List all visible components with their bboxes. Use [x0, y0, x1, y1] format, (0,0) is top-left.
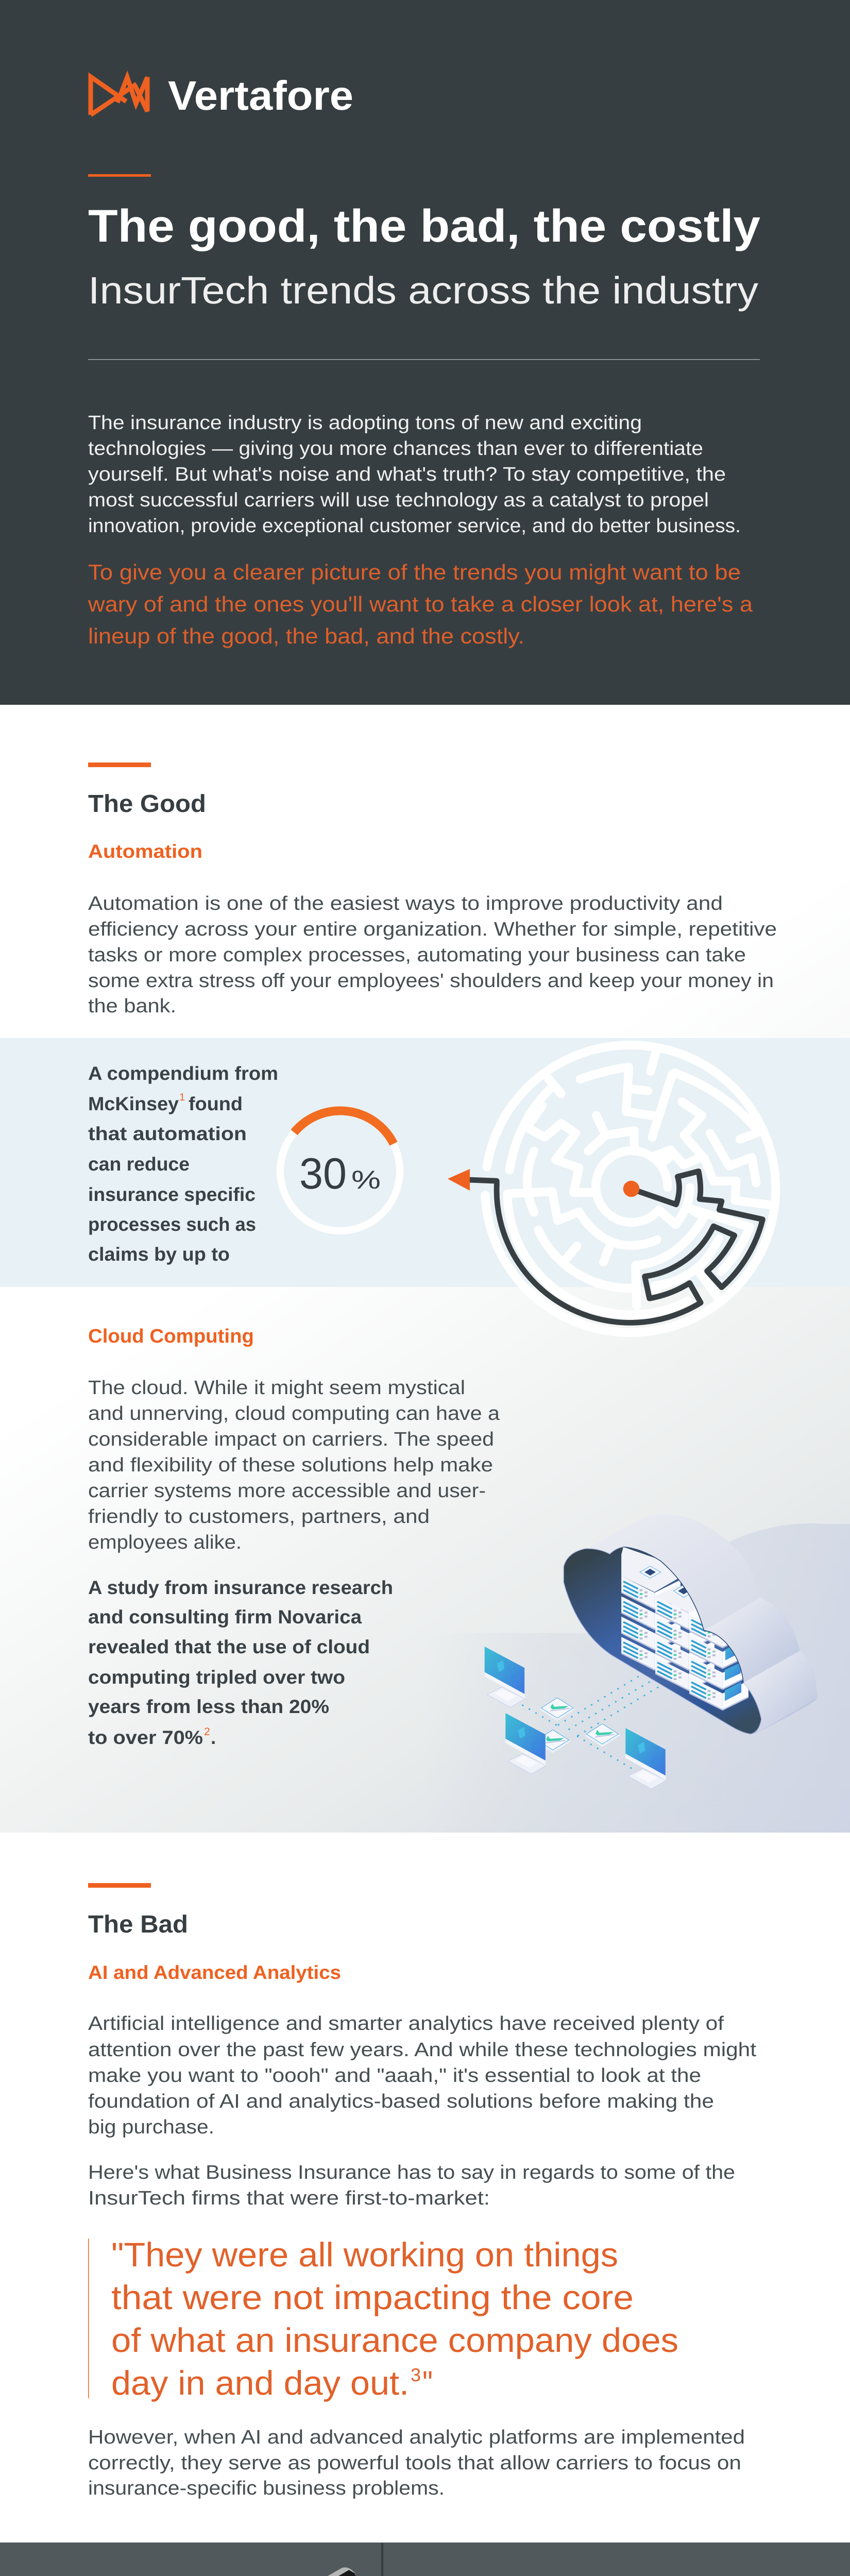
logo: Vertafore: Vertafore [168, 73, 353, 118]
text block: Business Insurance lead-in [88, 2162, 735, 2209]
arrow: maze solution path [470, 1172, 762, 1323]
chart: 30% ring: % [351, 1165, 381, 1194]
title: The good, the bad, the costly [88, 200, 761, 251]
icon: maze [448, 1045, 776, 1332]
text block: AI paragraph: Artificial intelligence and smarter analytics have received plenty of [88, 2013, 724, 2035]
callout: quote: " [422, 2364, 433, 2402]
heading: the good: The Good [88, 790, 206, 818]
arrow: maze exit [448, 1169, 470, 1191]
icon: Vertafore mark [91, 77, 147, 115]
callout: quote: of what an insurance company does [111, 2321, 678, 2359]
subheading: AI and advanced analytics: AI and Advanced Analytics [88, 1962, 341, 1983]
panel: the good [0, 762, 850, 1833]
text block: McKinsey stat [88, 1063, 278, 1265]
text block: intro paragraph: technologies — giving you more chances than ever to differentiate [88, 438, 703, 460]
text block: Novarica stat: years from less than 20% [88, 1696, 329, 1717]
text block: Novarica stat: and consulting firm Novarica [88, 1606, 362, 1628]
text block: automation: the bank. [88, 995, 176, 1017]
text block: AI paragraph [88, 2013, 756, 2138]
text block: McKinsey stat: found [189, 1093, 243, 1114]
text block: Business Insurance lead-in: InsurTech firms that were first-to-market: [88, 2188, 490, 2209]
text block: Novarica stat: . [211, 1727, 216, 1748]
subheading: cloud computing: Cloud Computing [88, 1326, 254, 1347]
text block: Novarica stat: computing tripled over two [88, 1667, 345, 1688]
text block: McKinsey stat: McKinsey [88, 1093, 179, 1114]
text block: however paragraph: insurance-specific business problems. [88, 2478, 445, 2499]
text block: cloud computing: employees alike. [88, 1532, 242, 1553]
text block: however paragraph: However, when AI and advanced analytic platforms are implemented [88, 2427, 745, 2448]
text block: cloud computing: carrier systems more accessible and user- [88, 1480, 486, 1502]
subtitle: InsurTech trends across the industry [88, 269, 758, 312]
logo: Vertafore [91, 73, 353, 118]
text block: intro paragraph: The insurance industry is adopting tons of new and exciting [88, 412, 642, 434]
callout: quote [88, 2235, 678, 2402]
monitor [60, 2567, 355, 2576]
text block: Novarica stat: to over 70% [88, 1727, 203, 1748]
chart: 30% ring [280, 1111, 400, 1231]
text block: automation: some extra stress off your employees' shoulders and keep your money in [88, 970, 774, 992]
text block: Novarica stat: 2 [204, 1726, 210, 1738]
text block: Novarica stat: revealed that the use of cloud [88, 1636, 370, 1657]
text block: cloud computing: and flexibility of these solutions help make [88, 1454, 493, 1476]
text block: however paragraph: correctly, they serve as powerful tools that allow carriers to focus on [88, 2452, 741, 2474]
text block: McKinsey stat: claims by up to [88, 1244, 230, 1265]
text block: Business Insurance lead-in: Here's what Business Insurance has to say in regards to some of the [88, 2162, 735, 2183]
illustration: monitor and thieves [0, 2543, 436, 2576]
text block: cloud computing [88, 1377, 500, 1553]
text block: McKinsey stat: can reduce [88, 1154, 190, 1175]
text block: AI paragraph: attention over the past few years. And while these technologies might [88, 2039, 756, 2061]
text block: AI paragraph: big purchase. [88, 2116, 214, 2138]
panel: McKinsey stat band [0, 1038, 850, 1287]
text block: McKinsey stat: 1 [179, 1092, 185, 1103]
text block: McKinsey stat: processes such as [88, 1214, 256, 1235]
heading: the bad: The Bad [88, 1911, 188, 1938]
panel: the bad [88, 1883, 756, 2499]
text block: intro paragraph: innovation, provide exceptional customer service, and do better business. [88, 515, 741, 537]
subheading: automation: Automation [88, 841, 202, 862]
text block: cloud computing: The cloud. While it might seem mystical [88, 1377, 465, 1399]
text block: orange intro: lineup of the good, the bad, and the costly. [88, 624, 524, 648]
text block: Novarica stat: A study from insurance research [88, 1577, 393, 1598]
callout: quote: 3 [411, 2364, 421, 2385]
text block: cloud computing: friendly to customers, partners, and [88, 1506, 430, 1528]
text block: orange intro: wary of and the ones you'll want to take a closer look at, here's a [88, 592, 753, 616]
callout: quote: that were not impacting the core [111, 2278, 634, 2316]
text block: automation: Automation is one of the easiest ways to improve productivity and [88, 893, 723, 914]
text block: intro paragraph [88, 412, 741, 537]
callout: quote: day in and day out. [111, 2364, 409, 2402]
panel: intro header [0, 0, 850, 705]
text block: McKinsey stat: that automation [88, 1123, 247, 1144]
icon: cloud servers illustration [484, 1523, 850, 1789]
text block: automation: efficiency across your entire organization. Whether for simple, repetitive [88, 919, 777, 940]
chart: 30% ring: 30 [299, 1149, 347, 1198]
text block: orange intro: To give you a clearer picture of the trends you might want to be [88, 560, 741, 584]
text block: McKinsey stat: A compendium from [88, 1063, 278, 1084]
text block: automation [88, 893, 777, 1017]
text block: cloud computing: and unnerving, cloud computing can have a [88, 1403, 500, 1425]
callout: quote: "They were all working on things [111, 2235, 618, 2274]
text block: however paragraph [88, 2427, 745, 2499]
text block: intro paragraph: most successful carriers will use technology as a catalyst to propel [88, 489, 709, 511]
text block: cloud computing: considerable impact on carriers. The speed [88, 1429, 494, 1450]
panel: the costly [0, 2543, 850, 2576]
text block: McKinsey stat: insurance specific [88, 1184, 256, 1205]
text block: automation: tasks or more complex processes, automating your business can take [88, 944, 746, 966]
text block: orange intro [88, 560, 753, 648]
text block: intro paragraph: yourself. But what's noise and what's truth? To stay competitive, the [88, 464, 726, 485]
text block: AI paragraph: foundation of AI and analytics-based solutions before making the [88, 2091, 714, 2112]
text block: Novarica stat [88, 1577, 393, 1748]
text block: AI paragraph: make you want to "oooh" and "aaah," it's essential to look at the [88, 2065, 701, 2087]
